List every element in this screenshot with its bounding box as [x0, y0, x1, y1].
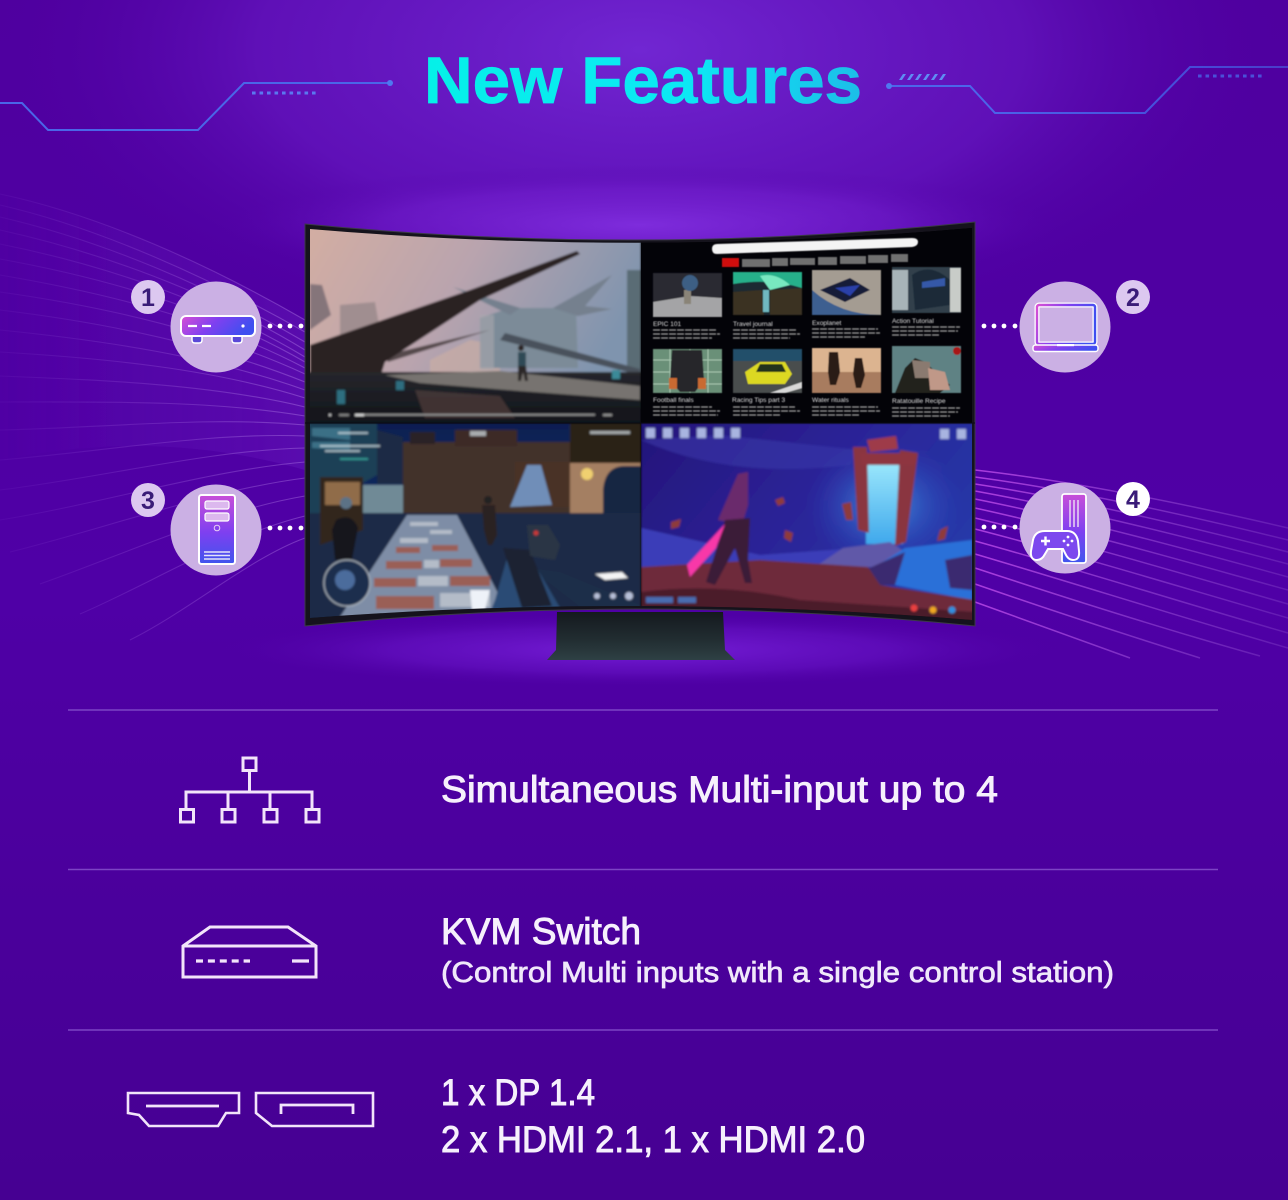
category tabs [722, 254, 908, 267]
icon: set-top box [181, 316, 255, 343]
thumbnail captions: Action Tutorial [892, 318, 934, 325]
badge 2: 2 [1126, 284, 1140, 312]
text: KVM switch [441, 911, 1114, 989]
thumbnail captions: EPIC 101 [653, 321, 682, 328]
thumbnail captions: Ratatouille Recipe [892, 398, 946, 405]
thumbnail captions: Football finals [653, 397, 694, 404]
badge 4 [1116, 482, 1150, 516]
title: New Features [424, 43, 862, 117]
icon: DisplayPort [256, 1093, 373, 1126]
connector dots [982, 525, 1017, 529]
badge 3 [131, 483, 165, 517]
connector dots [268, 526, 303, 530]
badge 2 [1116, 280, 1150, 314]
icon: console and gamepad [1031, 494, 1086, 563]
badge 3: 3 [141, 487, 155, 515]
screen scene: video browser [652, 237, 962, 418]
text: multi-input: Simultaneous Multi-input up to 4 [441, 769, 998, 810]
screen contents [305, 220, 977, 630]
source 2: laptop [982, 280, 1150, 372]
thumbnail captions: Travel journal [733, 321, 773, 328]
circuit line: right [886, 67, 1288, 113]
monitor stand [547, 612, 735, 660]
feature row: ports [128, 1072, 865, 1160]
thumbnail description lines [653, 327, 960, 416]
feature row: KVM switch [183, 911, 1114, 989]
thumbnail captions: Water rituals [812, 397, 849, 404]
icon: network tree [180, 758, 319, 822]
text: KVM switch: (Control Multi inputs with a single control station) [441, 957, 1114, 989]
icon: HDMI port [128, 1093, 239, 1126]
icon: KVM box [183, 927, 316, 977]
text: ports: 1 x DP 1.4 [441, 1072, 595, 1113]
connector dots [268, 324, 303, 328]
badge 1 [131, 280, 165, 314]
icon: tower [199, 495, 235, 564]
curved monitor [305, 220, 977, 630]
connector dots [982, 324, 1017, 328]
monitor bezel [305, 222, 975, 626]
screen scene: futuristic city video [305, 220, 641, 427]
text: ports: 2 x HDMI 2.1, 1 x HDMI 2.0 [441, 1119, 865, 1160]
thumbnail captions: Racing Tips part 3 [732, 397, 785, 404]
screen scene: first-person shooter [305, 423, 641, 630]
search bar [712, 238, 918, 254]
thumbnail captions [653, 318, 946, 405]
badge 4: 4 [1126, 486, 1140, 514]
icon: laptop [1033, 305, 1098, 352]
text: ports [441, 1072, 865, 1160]
circuit line: left [0, 80, 393, 130]
decorative wave lines: right [975, 470, 1288, 658]
badge 1: 1 [141, 284, 155, 312]
decorative wave lines: left [0, 194, 305, 640]
thumbnail row one [653, 267, 961, 317]
source 1: set-top box [131, 280, 303, 372]
text: KVM switch: KVM Switch [441, 911, 641, 952]
screen divider shade [305, 422, 975, 424]
thumbnail captions: Exoplanet [812, 320, 841, 327]
feature row: multi-input [180, 758, 998, 822]
thumbnail row two [653, 346, 961, 393]
source 4: game console [982, 482, 1150, 574]
source 3: desktop tower [131, 483, 303, 576]
screen scene: fantasy portal desktop [641, 423, 977, 630]
